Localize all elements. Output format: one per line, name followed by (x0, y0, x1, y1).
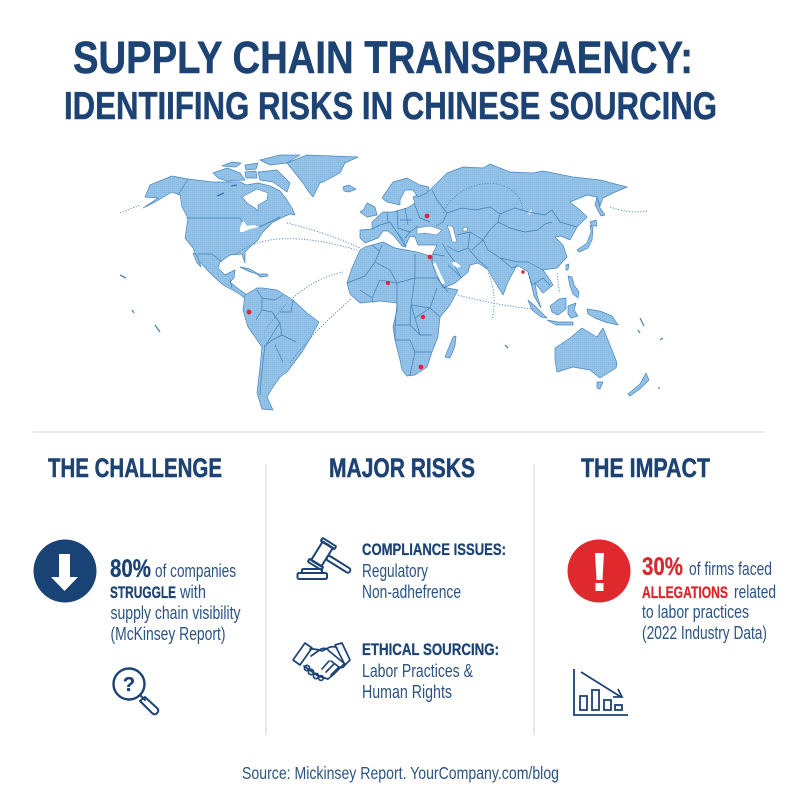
statistic text: ALLEGATIONS (642, 583, 728, 602)
ethical sourcing text: ETHICAL SOURCING: (362, 640, 499, 659)
source line: Source: Mickinsey Report. YourCompany.com/blog (242, 763, 559, 783)
ethical sourcing text: Labor Practices & (362, 661, 473, 681)
statistic text: 80% (110, 555, 151, 583)
compliance issues text: Non-adhefrence (362, 582, 461, 602)
title (64, 32, 717, 128)
statistic text: with (179, 582, 206, 602)
statistic text: 30% (642, 553, 683, 581)
panel: the impact (568, 453, 776, 715)
panel: the challenge (34, 453, 240, 714)
statistic text: (McKinsey Report) (110, 624, 226, 644)
icon: down arrow (34, 540, 96, 602)
panel: major risks (293, 453, 506, 702)
statistic text: to labor practices (642, 602, 749, 622)
icon: handshake (293, 643, 350, 680)
statistic text: STRUGGLE (110, 583, 176, 602)
icon: magnifier with question mark: ? (123, 674, 135, 696)
world map (120, 155, 663, 410)
heading: THE CHALLENGE (48, 453, 222, 483)
shipping route arcs (120, 183, 647, 363)
statistic text: of firms faced (689, 559, 772, 579)
heading: MAJOR RISKS (329, 453, 475, 483)
statistic text: related (734, 582, 776, 602)
statistic text: of companies (155, 561, 236, 581)
icon: magnifier with question mark (114, 668, 158, 714)
heading: THE IMPACT (581, 453, 710, 483)
country borders (178, 179, 577, 395)
statistic text: supply chain visibility (110, 603, 240, 623)
ethical sourcing text: Human Rights (362, 682, 452, 702)
statistic text (642, 553, 776, 643)
compliance issues text: COMPLIANCE ISSUES: (362, 540, 506, 559)
icon: exclamation mark (568, 540, 630, 602)
ethical sourcing text (362, 640, 499, 702)
compliance issues text: Regulatory (362, 561, 428, 581)
icon: gavel (298, 538, 357, 583)
icon: declining bar chart (574, 669, 628, 715)
title: SUPPLY CHAIN TRANSPRAENCY: (73, 32, 693, 83)
risk location markers (247, 214, 525, 369)
compliance issues text (362, 540, 506, 602)
statistic text (110, 555, 240, 644)
land masses (120, 155, 663, 410)
